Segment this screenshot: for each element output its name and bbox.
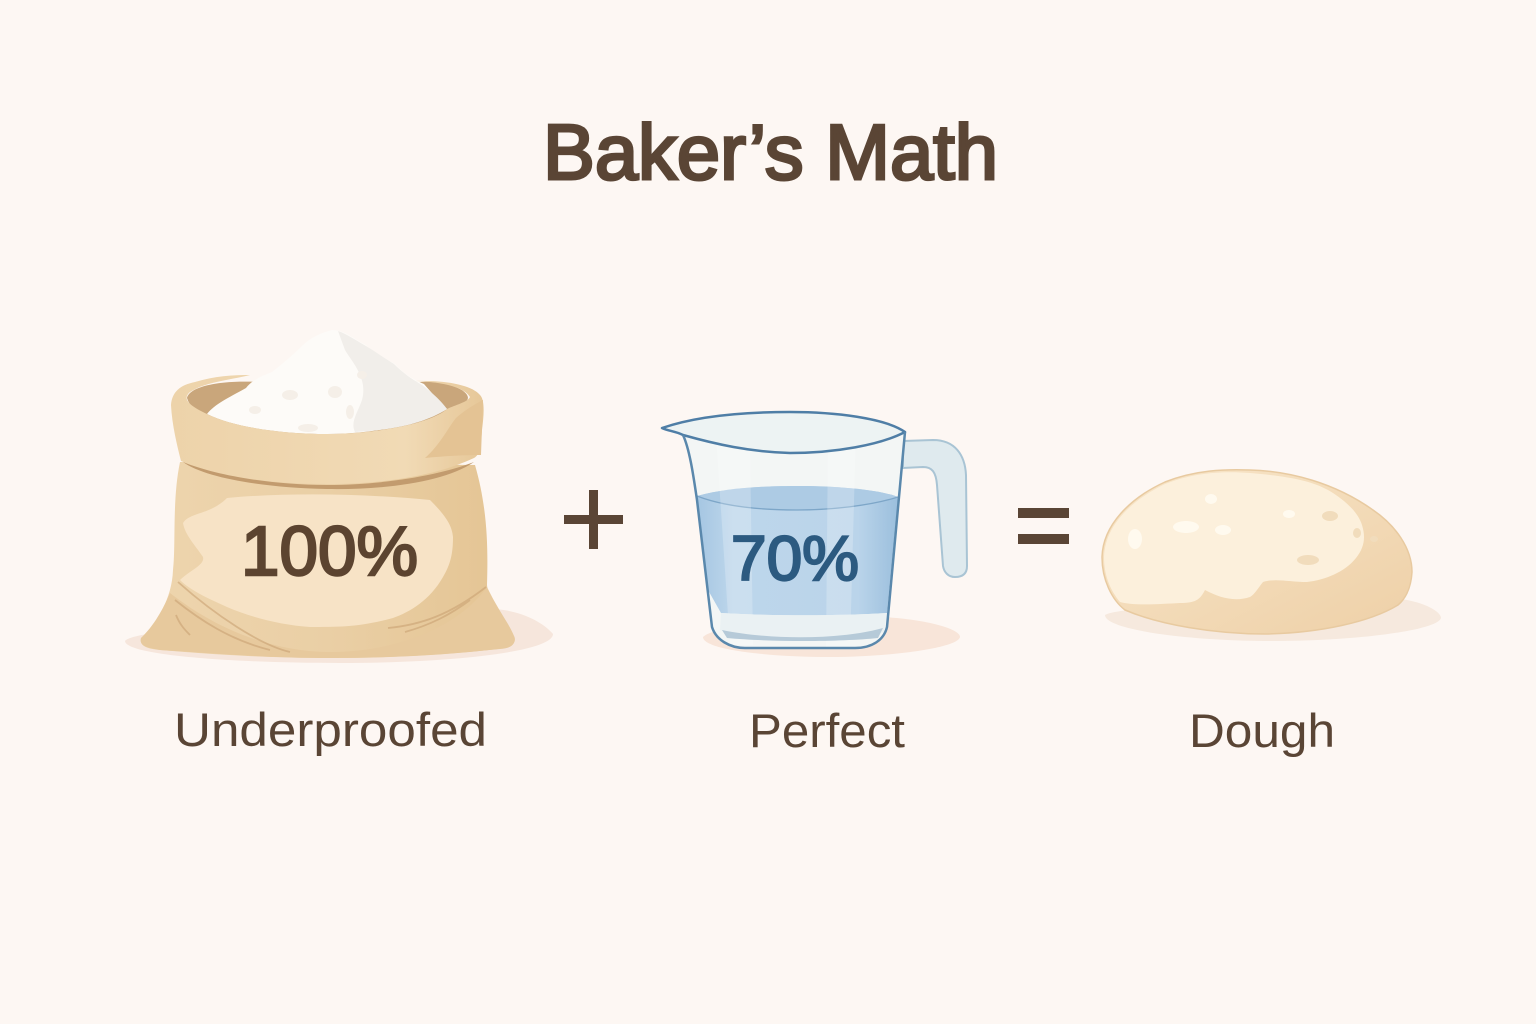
label: Dough: Dough [1189,704,1335,757]
water [697,486,898,615]
flour pile [207,330,447,434]
icon: measuring jug [662,412,967,657]
jug base [720,613,887,638]
dough body [1102,470,1412,634]
water surface [697,486,898,510]
jug outline [683,432,905,648]
equals sign [1018,508,1069,544]
label: Underproofed: Underproofed [174,703,487,756]
sack body [141,462,515,658]
dough shadow [1105,599,1441,641]
jug percentage: 70% [731,524,859,594]
plus sign [564,490,623,549]
icon: dough ball [1102,470,1441,641]
label: Perfect: Perfect [749,704,905,757]
sack lower folds [141,587,514,658]
jug glass [683,432,905,648]
dough spots [1128,494,1295,549]
jug shadow [703,616,960,657]
icon: flour sack [125,330,553,663]
rim fold shading [425,400,483,458]
sack label panel [180,494,453,627]
jug rim opening [662,412,905,453]
glass highlights [716,430,856,647]
flour inner rim [187,382,468,440]
flour speckles [249,371,367,432]
sack percentage: 100% [241,512,418,590]
sack rim [171,375,484,484]
jug handle [903,440,967,577]
title: Baker’s Math [543,108,998,196]
dough light area [1104,472,1364,604]
sack shadow [125,609,553,663]
